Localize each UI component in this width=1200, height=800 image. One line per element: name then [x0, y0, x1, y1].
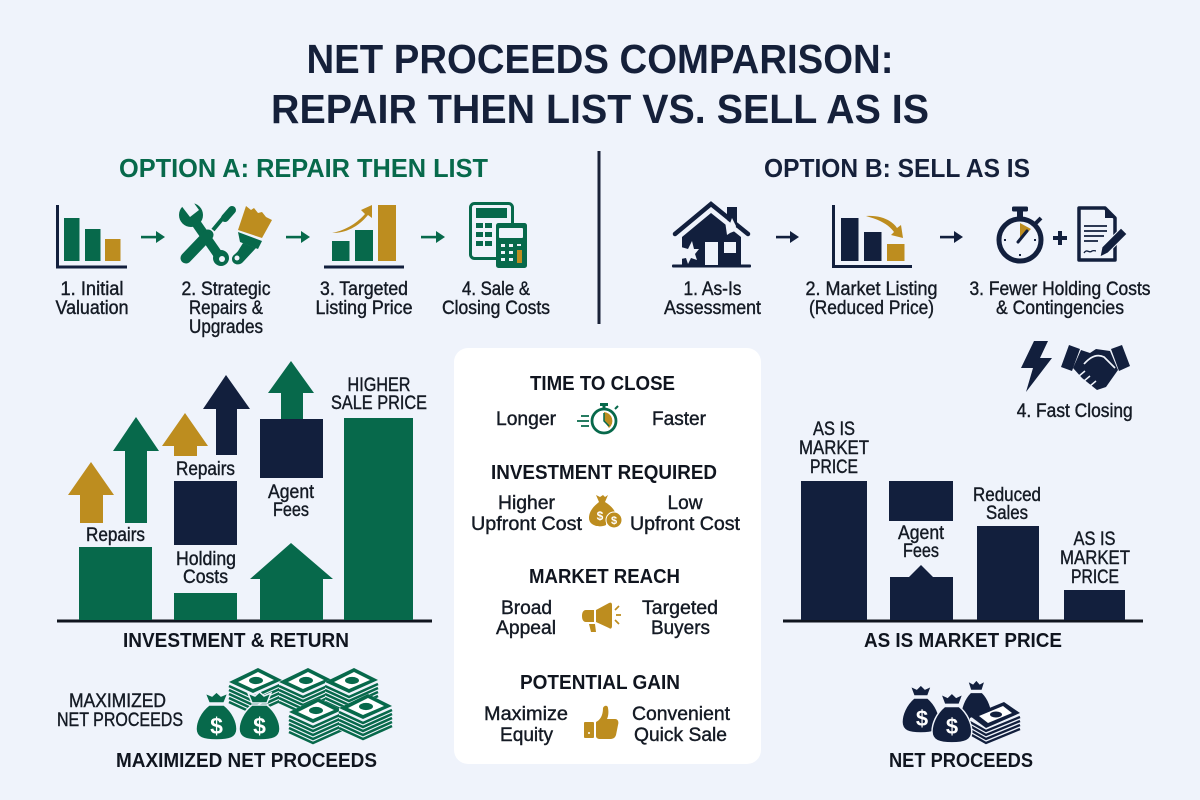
label: agent fees: Fees — [903, 541, 939, 562]
step 1 label — [56, 279, 128, 319]
label: as is market price small: AS IS — [1074, 529, 1116, 550]
text: convenient quick sale: Convenient — [632, 704, 731, 725]
step 2 label: Upgrades — [189, 317, 263, 338]
arrow: gold up 1 — [68, 462, 114, 523]
icon: reduced price chart — [834, 205, 912, 266]
label: as is market price small: MARKET — [1060, 548, 1130, 569]
icon: plus — [1053, 231, 1067, 245]
step 1 label: 1. As-Is — [684, 279, 742, 300]
label: maximized net proceeds — [57, 691, 183, 731]
label: reduced sales: Sales — [986, 503, 1028, 524]
arrow — [940, 231, 963, 243]
icon: money stacks and bags: $ — [210, 713, 223, 739]
icon: initial valuation chart — [58, 205, 127, 267]
label: reduced sales: Reduced — [973, 485, 1041, 506]
bar: reduced sales — [977, 526, 1039, 620]
label: as is market price: PRICE — [810, 457, 858, 478]
step 3 label — [316, 279, 412, 319]
step 3 label: & Contingencies — [996, 298, 1124, 319]
label: as is market price small — [1060, 529, 1130, 588]
label: agent fees — [898, 523, 945, 562]
label: as is market price: MARKET — [799, 438, 869, 459]
heading: as is market price: AS IS MARKET PRICE — [864, 629, 1062, 652]
panel: option A steps — [56, 199, 550, 338]
bar: holding costs — [174, 593, 237, 620]
icon: thumbs up — [584, 706, 618, 739]
text: low upfront cost: Low — [668, 493, 703, 514]
text: targeted buyers: Targeted — [642, 598, 718, 619]
text: low upfront cost: Upfront Cost — [630, 514, 741, 535]
step 1 label: Assessment — [664, 298, 762, 319]
title — [271, 36, 929, 132]
step 4 label: 4. Fast Closing — [1017, 401, 1133, 422]
label: holding costs — [176, 549, 236, 588]
icon: money bags: $ — [611, 515, 617, 527]
heading: potential gain: POTENTIAL GAIN — [520, 671, 680, 694]
step 3 label: 3. Fewer Holding Costs — [970, 279, 1150, 300]
label: repairs: Repairs — [176, 459, 235, 480]
label: agent fees: Fees — [273, 500, 309, 521]
step 2 label: 2. Strategic — [182, 279, 270, 300]
label: holding costs: Holding — [176, 549, 236, 570]
text: targeted buyers — [642, 598, 718, 639]
icon: stopwatch — [999, 206, 1041, 261]
step 2 label: (Reduced Price) — [809, 298, 934, 319]
heading: time to close: TIME TO CLOSE — [530, 372, 675, 395]
step 3 label: Listing Price — [316, 298, 412, 319]
icon: document and pencil — [1079, 208, 1127, 260]
text: broad appeal: Broad — [501, 598, 552, 619]
panel: comparison card — [454, 348, 761, 764]
chart: investment and return — [57, 361, 432, 622]
text: maximize equity: Equity — [500, 725, 553, 746]
text: targeted buyers: Buyers — [651, 618, 710, 639]
bar: repairs — [79, 547, 152, 620]
label: higher sale price: HIGHER — [348, 375, 410, 396]
bar: house arrow — [250, 543, 333, 620]
step 1 label — [664, 279, 762, 319]
label: agent fees: Agent — [268, 482, 315, 503]
label: as is market price small: PRICE — [1071, 567, 1119, 588]
heading: investment and return: INVESTMENT & RETURN — [123, 629, 349, 652]
bar: higher sale price — [344, 418, 413, 620]
step 2 label: Repairs & — [189, 298, 263, 319]
arrow: gold up 2 — [162, 413, 208, 456]
label: as is market price: AS IS — [813, 419, 855, 440]
arrow: green up 1 — [113, 417, 159, 523]
step 4 label — [442, 279, 550, 319]
icon: stopwatch — [577, 403, 618, 433]
heading: maximized net proceeds: MAXIMIZED NET PROCEEDS — [116, 749, 377, 772]
label: holding costs: Costs — [183, 567, 228, 588]
label: agent fees: Agent — [898, 523, 945, 544]
bar: as is market price — [801, 481, 867, 620]
text: higher upfront cost: Upfront Cost — [471, 514, 583, 535]
chart: as is market price — [783, 419, 1143, 622]
heading: option A: OPTION A: REPAIR THEN LIST — [119, 153, 488, 183]
arrow: navy up — [203, 375, 250, 455]
text: maximize equity: Maximize — [484, 704, 568, 725]
icon: money bags — [589, 495, 622, 528]
heading: net proceeds: NET PROCEEDS — [889, 749, 1033, 772]
label: repairs: Repairs — [86, 525, 145, 546]
title: REPAIR THEN LIST VS. SELL AS IS — [271, 86, 929, 132]
arrow — [286, 231, 310, 243]
label: maximized net proceeds: NET PROCEEDS — [57, 710, 183, 731]
text: broad appeal — [496, 598, 556, 639]
label: agent fees — [268, 482, 315, 521]
step 3 label — [970, 279, 1150, 319]
panel: option B steps — [664, 204, 1150, 422]
step 1 label: Valuation — [56, 298, 128, 319]
label: higher sale price — [331, 375, 427, 414]
icon: tools — [179, 199, 272, 266]
text: longer: Longer — [496, 409, 557, 430]
box: agent fees top — [889, 481, 953, 521]
icon: lightning — [1021, 341, 1052, 392]
text: low upfront cost — [630, 493, 741, 535]
text: maximize equity — [484, 704, 568, 746]
step 2 label — [806, 279, 938, 319]
step 4 label: Closing Costs — [442, 298, 550, 319]
heading: investment required: INVESTMENT REQUIRED — [491, 461, 717, 484]
icon: money bags and cash: $ — [946, 714, 958, 739]
bar: agent fees — [890, 565, 953, 620]
step 2 label — [182, 279, 270, 338]
text: faster: Faster — [652, 409, 707, 430]
bar: as is small — [1064, 590, 1125, 620]
icon: damaged house — [672, 204, 751, 268]
text: higher upfront cost — [471, 493, 583, 535]
text: convenient quick sale — [632, 704, 731, 746]
step 4 label: 4. Sale & — [462, 279, 530, 300]
step 3 label: 3. Targeted — [320, 279, 408, 300]
box: agent fees — [260, 419, 323, 478]
label: reduced sales — [973, 485, 1041, 524]
icon: targeted listing chart — [324, 205, 404, 268]
text: higher upfront cost: Higher — [498, 493, 556, 514]
arrow — [421, 231, 445, 243]
title: NET PROCEEDS COMPARISON: — [306, 36, 894, 82]
icon: money bags and cash — [902, 680, 1020, 743]
arrow: green up 2 — [268, 361, 314, 419]
heading: option B: OPTION B: SELL AS IS — [764, 153, 1030, 183]
box: navy block — [174, 481, 237, 545]
icon: money stacks and bags — [196, 668, 392, 745]
step 1 label: 1. Initial — [60, 279, 124, 300]
icon: megaphone — [582, 603, 621, 632]
icon: money stacks and bags: $ — [253, 713, 266, 739]
label: higher sale price: SALE PRICE — [331, 393, 427, 414]
icon: handshake — [1061, 345, 1130, 390]
arrow — [776, 231, 799, 243]
icon: money bags and cash: $ — [916, 706, 928, 731]
icon: calculators — [470, 204, 527, 268]
icon: money bags: $ — [597, 509, 604, 523]
text: broad appeal: Appeal — [496, 618, 556, 639]
arrow — [141, 231, 165, 243]
heading: market reach: MARKET REACH — [529, 565, 680, 588]
step 2 label: 2. Market Listing — [806, 279, 938, 300]
label: as is market price — [799, 419, 869, 478]
text: convenient quick sale: Quick Sale — [634, 725, 727, 746]
label: maximized net proceeds: MAXIMIZED — [69, 691, 166, 712]
